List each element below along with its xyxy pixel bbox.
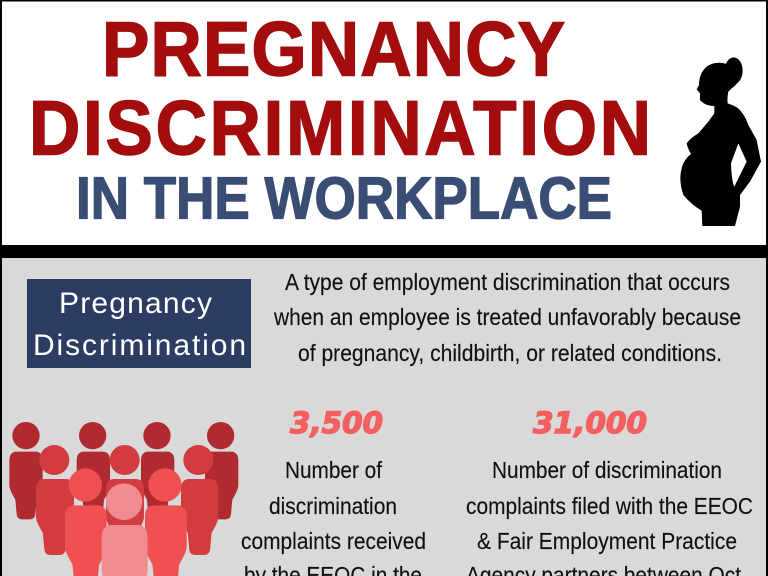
- second row: [36, 445, 218, 555]
- front person: [102, 483, 148, 576]
- label box: Pregnancy Discrimination: Discrimination: [33, 329, 246, 362]
- definition text: of pregnancy, childbirth, or related conditions.: [298, 340, 722, 366]
- title: [29, 6, 651, 231]
- stat: 31,000: [466, 406, 753, 576]
- header panel: [0, 0, 768, 246]
- stat: 31,000: & Fair Employment Practice: [477, 528, 737, 554]
- back row: [9, 422, 238, 519]
- title: DISCRIMINATION: [29, 85, 651, 171]
- stat: 3,500: 3,500: [290, 406, 383, 440]
- definition text: [273, 269, 741, 366]
- definition text: A type of employment discrimination that occurs: [285, 269, 730, 295]
- stat: 3,500: Number of: [285, 457, 382, 483]
- stat: 3,500: discrimination: [269, 493, 397, 519]
- label box: Pregnancy Discrimination: [27, 279, 251, 368]
- stat: 31,000: 31,000: [533, 406, 647, 440]
- label box: Pregnancy Discrimination: Pregnancy: [59, 287, 212, 320]
- title: PREGNANCY: [102, 6, 565, 92]
- stat: 3,500: complaints received: [241, 528, 426, 554]
- stat: 31,000: Number of discrimination: [492, 457, 722, 483]
- black divider band: [0, 245, 768, 258]
- stat: 3,500: [241, 406, 426, 576]
- title: IN THE WORKPLACE: [76, 165, 612, 231]
- icon: pregnant woman silhouette: [680, 57, 761, 226]
- third row: [65, 468, 187, 576]
- icon: crowd of people: [9, 422, 238, 576]
